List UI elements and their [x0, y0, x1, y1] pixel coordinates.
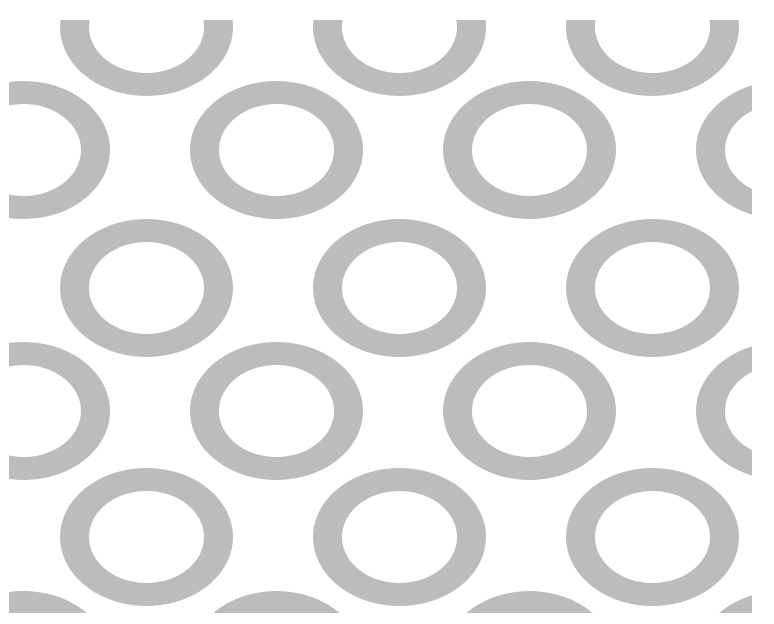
ring row 4	[9, 342, 752, 480]
ring row 3	[60, 219, 739, 357]
ring row 6	[9, 591, 752, 613]
ring row 5	[60, 468, 739, 606]
ring row 2	[9, 81, 752, 219]
ring row 1	[60, 20, 739, 96]
